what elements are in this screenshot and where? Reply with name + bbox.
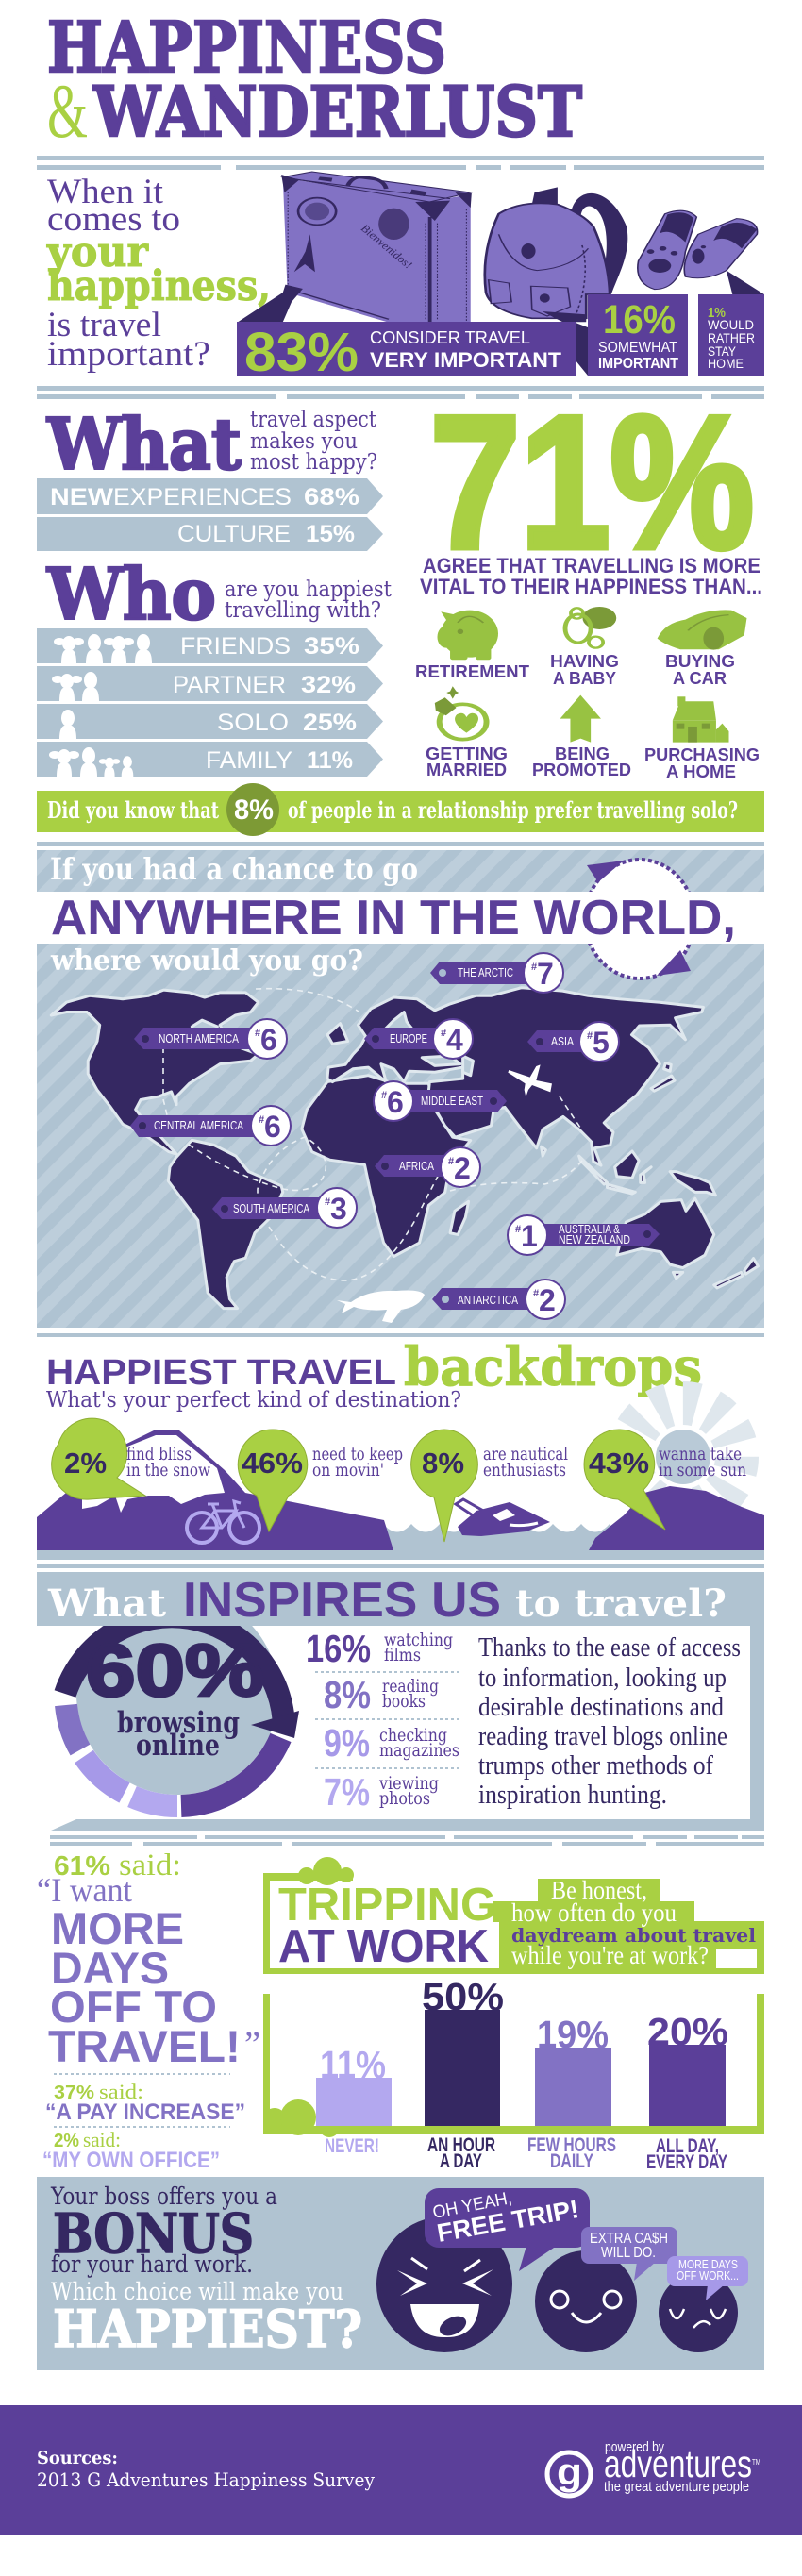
panel: tripping at work header: TRIPPING [278,1880,496,1931]
bar: never 11%: NEVER! [325,2135,379,2157]
tag: middle east #6: MIDDLE EAST [421,1094,483,1108]
icon: pacifier [565,607,616,648]
tag: europe #4: EUROPE [390,1031,427,1045]
heading: who: travelling with? [225,598,381,623]
bubble: 46% on the move: 46% [242,1447,303,1480]
islands [579,1156,607,1184]
arrow bar: partner [37,666,383,701]
continent: north america [51,990,259,1154]
tag: asia #5: # [587,1030,593,1042]
icon: backpack [485,187,627,322]
heading: happiest travel backdrops: What's your perfect kind of destination? [46,1388,461,1413]
heading: what aspect: What [46,403,242,486]
bar: never 11% [316,2043,392,2157]
script text on suitcase: Bienvenidos! [359,222,415,272]
mountain [37,1430,393,1550]
did you know banner [37,783,764,836]
big stat: 71%: 71% [430,377,754,588]
text: bonus question: Which choice will make you [51,2278,343,2305]
bubble: 2% snow: find bliss [126,1444,192,1464]
question: travel importance: important? [47,335,210,374]
speech bubble: more days off: OFF WORK... [677,2268,739,2283]
arrow bar: culture: 15% [306,521,355,547]
tag: the arctic #7: 7 [537,957,554,991]
arrow bar: partner: 32% [301,672,356,698]
icon: speed boat [456,1499,550,1536]
donut chart: 60% browsing online: 60% [86,1629,264,1712]
heading: what inspires us to travel: What [47,1581,167,1626]
quote: a pay increase: 37% [54,2083,94,2103]
donut chart: 60% browsing online: browsing [117,1706,240,1740]
continent: africa [302,1076,471,1257]
arrow bar: friends [37,628,383,663]
arrow bar: culture [37,517,383,551]
tag: central america #6: CENTRAL AMERICA [154,1118,243,1132]
panel: tripping at work header: while you're at work? [511,1941,709,1969]
label: having a baby: A BABY [553,669,616,688]
donut chart: 60% browsing online [65,1593,299,1806]
tag: central america #6: # [259,1114,264,1126]
heading: what aspect: most happy? [250,450,377,475]
bubble: 43% sun: wanna take [659,1444,742,1464]
tag: australia and new zealand #1: NEW ZEALAND [559,1232,630,1246]
tag: central america #6: 6 [264,1110,281,1144]
label: retirement: RETIREMENT [415,662,529,681]
quote: more days off to travel: OFF TO [50,1982,217,2032]
did you know banner: 8% [234,795,274,826]
icon: wedding ring [435,686,487,740]
bar: all day every day 20%: ALL DAY, [656,2135,719,2157]
tag: the arctic #7: # [531,962,537,973]
arrow bar: new experiences: NEW [50,484,113,510]
tag: africa #2: 2 [454,1151,471,1185]
bubble: 43% sun: in some sun [659,1460,746,1480]
question: travel importance [46,173,271,374]
arrow bar: new experiences [37,478,383,514]
bubble: 46% on the move [238,1430,403,1531]
tag: africa #2: # [448,1156,454,1167]
tag: the arctic #7: THE ARCTIC [458,965,513,979]
text: bonus question: HAPPIEST? [53,2299,362,2359]
sources: 2013 G Adventures Happiness Survey [37,2468,376,2491]
stat: 8% reading books [324,1673,439,1716]
stat: 16% watching films [306,1627,453,1670]
panel: tripping at work header: how often do you [511,1899,677,1927]
callout: 1% rather stay home [698,294,764,376]
stat: 7% viewing photos: viewing [378,1773,439,1794]
face: big laughing [376,2216,512,2352]
speech bubble: extra cash: EXTRA CA$H [590,2231,668,2247]
question: travel importance: When it [47,173,164,211]
callout: 83% very important: VERY IMPORTANT [370,348,562,372]
label: getting married: GETTING [426,744,508,763]
tag: south america #3 [212,1188,357,1228]
heading: who: are you happiest [225,577,393,602]
bubble: 2% snow: in the snow [126,1460,211,1480]
stat: 16% watching films: 16% [306,1627,371,1670]
tag: antarctica #2: # [533,1288,539,1299]
callout: 1% rather stay home: 1% [708,305,726,321]
heading: who [46,553,393,636]
question: travel importance: happiness, [47,262,271,310]
tag: europe #4: 4 [446,1023,463,1057]
speech bubble: extra cash: WILL DO. [601,2245,656,2261]
logo: g adventures: adventures [604,2442,752,2485]
quote: my own office [42,2128,220,2173]
tag: australia and new zealand #1: # [515,1224,521,1235]
panel: tripping at work header: daydream about travel [511,1924,756,1947]
heading: if you had a chance: If you had a chance to go [50,851,418,887]
arrow bar: culture: CULTURE [177,521,291,547]
title: & [47,68,88,154]
logo: g adventures [547,2439,760,2496]
paragraph: ease of access: Thanks to the ease of access [478,1633,741,1663]
quote: more days off to travel: TRAVEL! [48,2021,241,2071]
tag: north america #6 [134,1019,287,1059]
icon: house [673,696,728,743]
arrow bar: friends: 35% [304,633,359,660]
arrow bar: solo [37,704,383,739]
icon: slippers [638,210,764,294]
tag: north america #6: NORTH AMERICA [159,1031,239,1045]
bar: an hour a day 50%: 50% [422,1975,504,2018]
quote: a pay increase: “A PAY INCREASE” [45,2099,245,2125]
quote: more days off to travel: ” [244,2023,260,2066]
bubble: 8% nautical: enthusiasts [483,1460,566,1480]
tag: europe #4 [364,1019,473,1059]
callout: 1% rather stay home: STAY [708,343,737,359]
speech bubble: more days off: MORE DAYS [678,2257,738,2271]
bar: an hour a day 50%: A DAY [440,2150,482,2172]
icon: compass ring [37,860,764,979]
continent: south america [168,1140,283,1309]
bar: all day every day 20%: EVERY DAY [646,2151,727,2173]
question: travel importance: comes to [47,200,180,239]
quote: my own office: said: [83,2128,121,2151]
tag: north america #6: # [255,1028,260,1039]
quote: more days off to travel: “I want [37,1871,132,1909]
bubble: 8% nautical: are nautical [483,1444,568,1464]
stat: 9% checking magazines: magazines [379,1740,459,1761]
callout: 1% rather stay home: RATHER [708,330,755,345]
hill [589,1486,764,1550]
callout: 1% rather stay home: HOME [708,356,744,371]
callout: 16% somewhat important: IMPORTANT [598,356,678,372]
heading: happiest travel backdrops [46,1336,702,1413]
heading: what inspires us to travel: to travel? [515,1581,727,1626]
icon: suitcase [238,172,472,322]
tag: south america #3: # [325,1196,330,1208]
panel: bonus [37,2177,764,2370]
panel: tripping at work header: AT WORK [278,1921,489,1972]
heading: what aspect: makes you [250,429,358,454]
paragraph: ease of access: to information, looking up [478,1664,727,1693]
bubble: 43% sun [584,1430,746,1530]
speech bubble: extra cash [581,2227,677,2281]
icon: up arrow [560,695,601,743]
speech bubble: free trip [425,2188,590,2271]
label: getting married: MARRIED [426,761,507,779]
quote: more days off to travel: MORE [51,1903,184,1953]
label: buying a car: BUYING [665,652,735,671]
bar: few hours daily 19%: FEW HOURS [527,2134,616,2156]
tag: antarctica #2: ANTARCTICA [458,1293,518,1307]
donut chart: 60% browsing online: online [136,1729,220,1763]
tag: australia and new zealand #1 [508,1215,660,1255]
big stat: 71%: VITAL TO THEIR HAPPINESS THAN... [420,575,762,598]
icon: plane [508,1064,552,1097]
sources [37,2448,376,2491]
tag: south america #3: 3 [330,1192,347,1226]
logo: g adventures: the great adventure people [604,2479,749,2495]
bar: an hour a day 50%: AN HOUR [427,2134,495,2156]
icon: piggy bank [437,611,498,660]
bubble: 2% snow: 2% [64,1447,107,1480]
text: bonus question: for your hard work. [51,2250,253,2278]
bubble: 46% on the move: need to keep [312,1444,403,1464]
paragraph: ease of access: reading travel blogs online [478,1722,727,1751]
heading: what aspect: travel aspect [250,408,377,432]
bubble: 8% nautical: 8% [422,1447,464,1480]
quote: my own office: 2% [54,2131,79,2151]
quote: more days off to travel: said: [119,1848,181,1882]
panel: anywhere in the world map [37,850,764,1328]
arrow bar: solo: SOLO [217,710,289,736]
bar: an hour a day 50% [422,1975,504,2172]
label: purchasing a home: A HOME [666,762,736,781]
arrow bar: friends: FRIENDS [180,633,291,660]
tag: africa #2: AFRICA [399,1159,434,1173]
callout: 16% somewhat important: 16% [603,297,676,343]
stat: 7% viewing photos [324,1770,439,1814]
flight paths [163,989,582,1280]
heading: happiest travel backdrops: HAPPIEST TRAVEL [46,1353,396,1393]
heading: what inspires us to travel [47,1573,727,1628]
icon: bicycle [187,1501,259,1543]
text: bonus question: BONUS [53,2202,254,2266]
icon: sun [629,1403,737,1511]
panel: what inspires us [37,1572,764,1831]
bar: all day every day 20%: 20% [647,2010,728,2053]
callout: 83% very important: 83% [244,322,359,383]
paragraph: ease of access: trumps other methods of [478,1751,714,1781]
stat: 7% viewing photos: 7% [324,1770,370,1814]
logo: g adventures: TM [752,2458,760,2467]
tag: middle east #6: 6 [387,1085,404,1119]
tag: north america #6: 6 [260,1023,277,1057]
stat: 7% viewing photos: photos [379,1788,430,1809]
arrow bar: family [37,742,383,777]
arrow bar: family: 11% [307,747,353,774]
quote: more days off to travel: 61% [54,1851,110,1882]
heading: happiest travel backdrops: backdrops [404,1336,702,1398]
bubble: 8% nautical [411,1430,568,1542]
logo: g adventures: g [557,2451,582,2493]
quote: more days off to travel: DAYS [51,1943,169,1993]
label: purchasing a home [644,745,760,781]
bubble: 43% sun: 43% [589,1447,649,1480]
question: travel importance: your [46,228,149,276]
tag: australia and new zealand #1: AUSTRALIA & [559,1222,620,1236]
arrow bar: new experiences: 68% [304,484,359,510]
arrow bar: family: FAMILY [206,747,292,774]
tag: the arctic #7 [430,953,563,993]
bar: few hours daily 19%: DAILY [550,2150,593,2172]
footer [0,2405,802,2535]
label: being promoted [532,744,631,779]
question: travel importance: is travel [47,306,161,344]
tag: asia #5: ASIA [551,1034,574,1048]
bar: few hours daily 19% [527,2013,616,2172]
bar: few hours daily 19%: 19% [537,2013,609,2056]
label: getting married [426,744,508,779]
tag: asia #5 [527,1022,619,1062]
quote: my own office: “MY OWN OFFICE” [42,2148,220,2173]
stat: 16% watching films: watching [384,1630,453,1650]
stat: 9% checking magazines: 9% [324,1721,370,1765]
tag: antarctica #2 [432,1280,565,1319]
paragraph: ease of access [478,1633,741,1810]
label: buying a car: A CAR [673,669,727,688]
tag: middle east #6: # [381,1090,387,1101]
bar: all day every day 20% [646,2010,728,2173]
heading: what inspires us to travel: INSPIRES US [183,1573,501,1628]
label: being promoted: PROMOTED [532,761,631,779]
world map [51,988,758,1309]
logo: g adventures: powered by [605,2439,664,2455]
stat: 9% checking magazines [324,1721,459,1765]
quote: a pay increase: said: [99,2080,143,2103]
continent: eurasia [327,988,703,1165]
stat: 8% reading books: reading [382,1676,439,1697]
bubble: 46% on the move: on movin' [312,1460,384,1480]
heading: where would you go: where would you go? [50,945,363,978]
tag: africa #2 [375,1147,480,1187]
paragraph: ease of access: desirable destinations and [478,1693,724,1722]
arrow bar: partner: PARTNER [173,672,286,698]
sources: Sources: [37,2448,118,2468]
speech bubble: free trip: FREE TRIP! [435,2195,581,2248]
label: being promoted: BEING [555,744,610,763]
bubble: 2% snow [52,1418,211,1499]
tag: south america #3: SOUTH AMERICA [233,1201,309,1215]
britain [327,1024,348,1044]
arrow bar: solo: 25% [303,710,357,736]
header band [37,1572,764,1626]
quote: more days off to travel [37,1848,260,2071]
callout: 16% somewhat important [588,294,688,376]
label: buying a car [665,652,735,688]
callout: 83% very important [237,322,588,383]
callout: 1% rather stay home: WOULD [708,317,754,332]
arrow bar: new experiences: EXPERIENCES [113,484,292,510]
title [47,8,582,154]
stat: 16% watching films: films [384,1645,421,1665]
water [383,1524,610,1552]
tag: asia #5: 5 [593,1026,610,1060]
tag: europe #4: # [441,1028,446,1039]
panel: backdrops scene [37,1403,764,1560]
did you know banner: Did you know that [47,796,219,824]
title: HAPPINESS [47,8,446,89]
tag: middle east #6 [374,1081,507,1121]
paragraph: ease of access: inspiration hunting. [478,1781,667,1810]
bar chart: daydream frequency [263,1975,764,2173]
speech bubble: free trip: OH YEAH, [431,2188,513,2223]
heading: anywhere in the world: ANYWHERE IN THE WORLD, [51,891,736,945]
label: purchasing a home: PURCHASING [644,745,760,764]
callout: 83% very important: CONSIDER TRAVEL [370,328,530,347]
tag: central america #6 [130,1106,291,1146]
icon: car [658,610,746,650]
text: bonus question [50,2183,362,2359]
text: bonus question: Your boss offers you a [50,2183,277,2210]
stat: 8% reading books: 8% [324,1673,371,1716]
label: having a baby [550,652,619,688]
heading: what aspect [46,403,377,486]
tag: antarctica #2: 2 [539,1283,556,1317]
panel: tripping at work header: Be honest, [551,1876,647,1904]
speech bubble: more days off [667,2256,748,2300]
bar: never 11%: 11% [320,2043,386,2086]
title: WANDERLUST [92,72,582,153]
heading: who: Who [46,553,216,636]
stat: 9% checking magazines: checking [379,1725,447,1746]
panel: tripping at work header [263,1857,764,1974]
stat: 8% reading books: books [382,1691,426,1712]
face: medium smiling [535,2250,637,2352]
label: having a baby: HAVING [550,652,619,671]
tag: australia and new zealand #1: 1 [521,1219,538,1253]
callout: 16% somewhat important: SOMEWHAT [598,340,677,356]
big stat: 71%: AGREE THAT TRAVELLING IS MORE [423,554,760,577]
face: small unimpressed [659,2273,738,2352]
icon: whale [337,1291,425,1323]
quote: a pay increase [45,2080,245,2125]
